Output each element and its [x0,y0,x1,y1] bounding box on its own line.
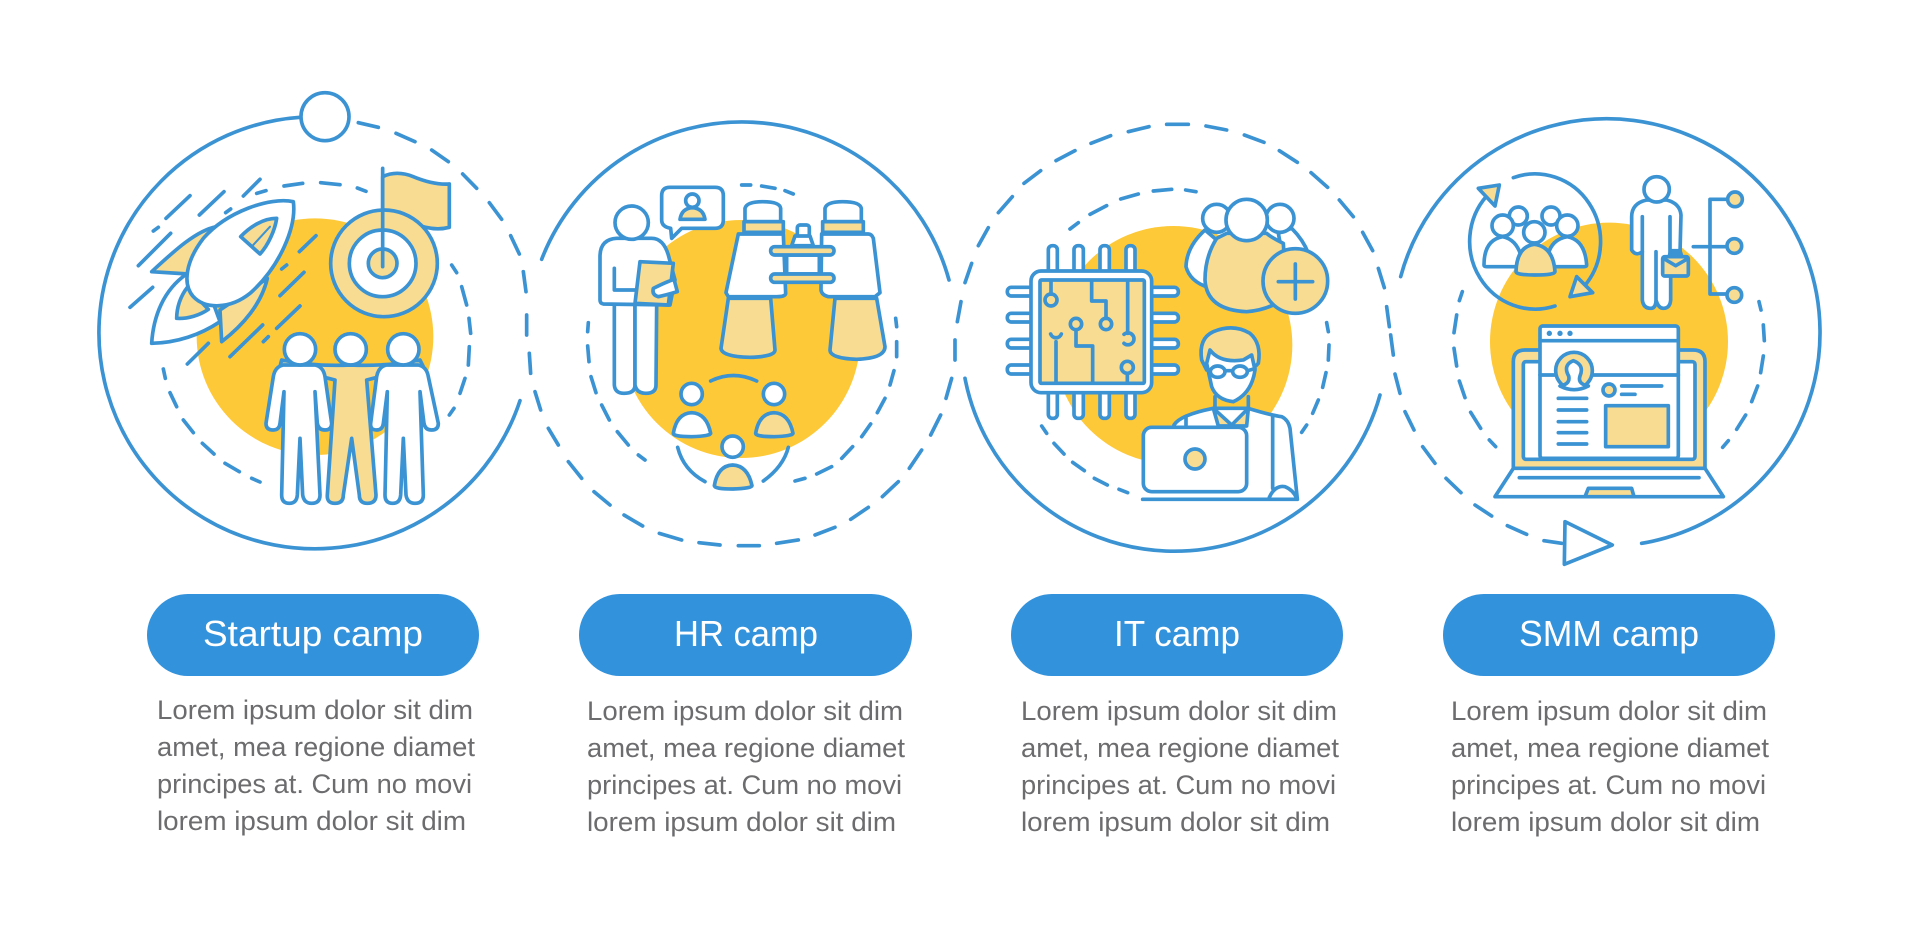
text block: HR camp description [587,696,905,837]
text block: Startup camp description [157,695,475,836]
icon: developer with laptop [1143,328,1297,499]
text block: IT camp description: Lorem ipsum dolor sit dim [1021,696,1337,726]
label pill: SMM camp: SMM camp [1519,613,1699,654]
text block: HR camp description: principes at. Cum no movi [587,770,902,800]
text block: SMM camp description: Lorem ipsum dolor sit dim [1451,696,1767,726]
icon: team of three people [266,334,438,503]
yellow backdrop circle [622,220,860,458]
outer dashed arc [1405,412,1562,543]
icon: target with flag [331,168,449,317]
inner dashed ring [588,185,897,481]
text block: Startup camp description: Lorem ipsum dolor sit dim [157,695,473,725]
icon: group with plus badge [1186,199,1328,313]
icon: speech bubble with person [662,187,723,238]
small orbit circle [301,93,349,141]
outer solid arc [542,122,949,280]
text block: IT camp description: principes at. Cum no movi [1021,770,1336,800]
outer dashed arc [955,124,1400,393]
text block: Startup camp description: amet, mea regione diamet [157,732,475,762]
icon: person with tablet [600,206,677,393]
inner dashed ring [1454,292,1764,447]
outer dashed arc [358,123,558,445]
inner dashed ring [1042,189,1329,493]
text block: SMM camp description: principes at. Cum no movi [1451,770,1766,800]
icon: rotating team [1470,174,1601,309]
panel: startup camp illustration [99,93,558,549]
label pill: HR camp [579,594,912,676]
label pill: SMM camp [1443,594,1775,676]
icon: rocket [152,201,294,343]
outer solid arc [965,378,1380,551]
text block: IT camp description: amet, mea regione diamet [1021,733,1339,763]
text block: HR camp description: amet, mea regione diamet [587,733,905,763]
yellow backdrop circle [1490,223,1728,461]
icon: microchip [1007,246,1178,418]
speed lines [130,179,316,364]
icon: meeting circle of three people [673,375,793,489]
outer solid arc [1401,119,1820,543]
text block: Startup camp description: lorem ipsum dolor sit dim [157,806,466,836]
text block: SMM camp description: amet, mea regione diamet [1451,733,1769,763]
panel: IT camp illustration [955,124,1400,551]
outer dashed arc [568,378,952,546]
text block: IT camp description: lorem ipsum dolor sit dim [1021,807,1330,837]
panel: HR camp illustration [542,122,952,546]
text block: HR camp description: lorem ipsum dolor sit dim [587,807,896,837]
label pill: Startup camp [147,594,479,676]
yellow backdrop circle [197,218,433,455]
label pill: HR camp: HR camp [674,613,818,654]
text block: SMM camp description [1451,696,1769,837]
label pill: IT camp: IT camp [1114,613,1240,654]
text block: IT camp description [1021,696,1339,837]
icon: laptop with profile page [1495,326,1723,497]
label pill: IT camp [1011,594,1343,676]
icon: binoculars [721,202,885,359]
label pill: Startup camp: Startup camp [203,613,423,654]
inner dashed ring [163,183,471,482]
text block: HR camp description: Lorem ipsum dolor sit dim [587,696,903,726]
text block: SMM camp description: lorem ipsum dolor sit dim [1451,807,1760,837]
yellow backdrop circle [1054,226,1292,464]
icon: businessman with options tree [1632,177,1742,308]
arrow: play triangle [1564,522,1612,564]
panel: SMM camp illustration [1401,119,1820,564]
outer solid arc [99,117,520,549]
text block: Startup camp description: principes at. Cum no movi [157,769,472,799]
